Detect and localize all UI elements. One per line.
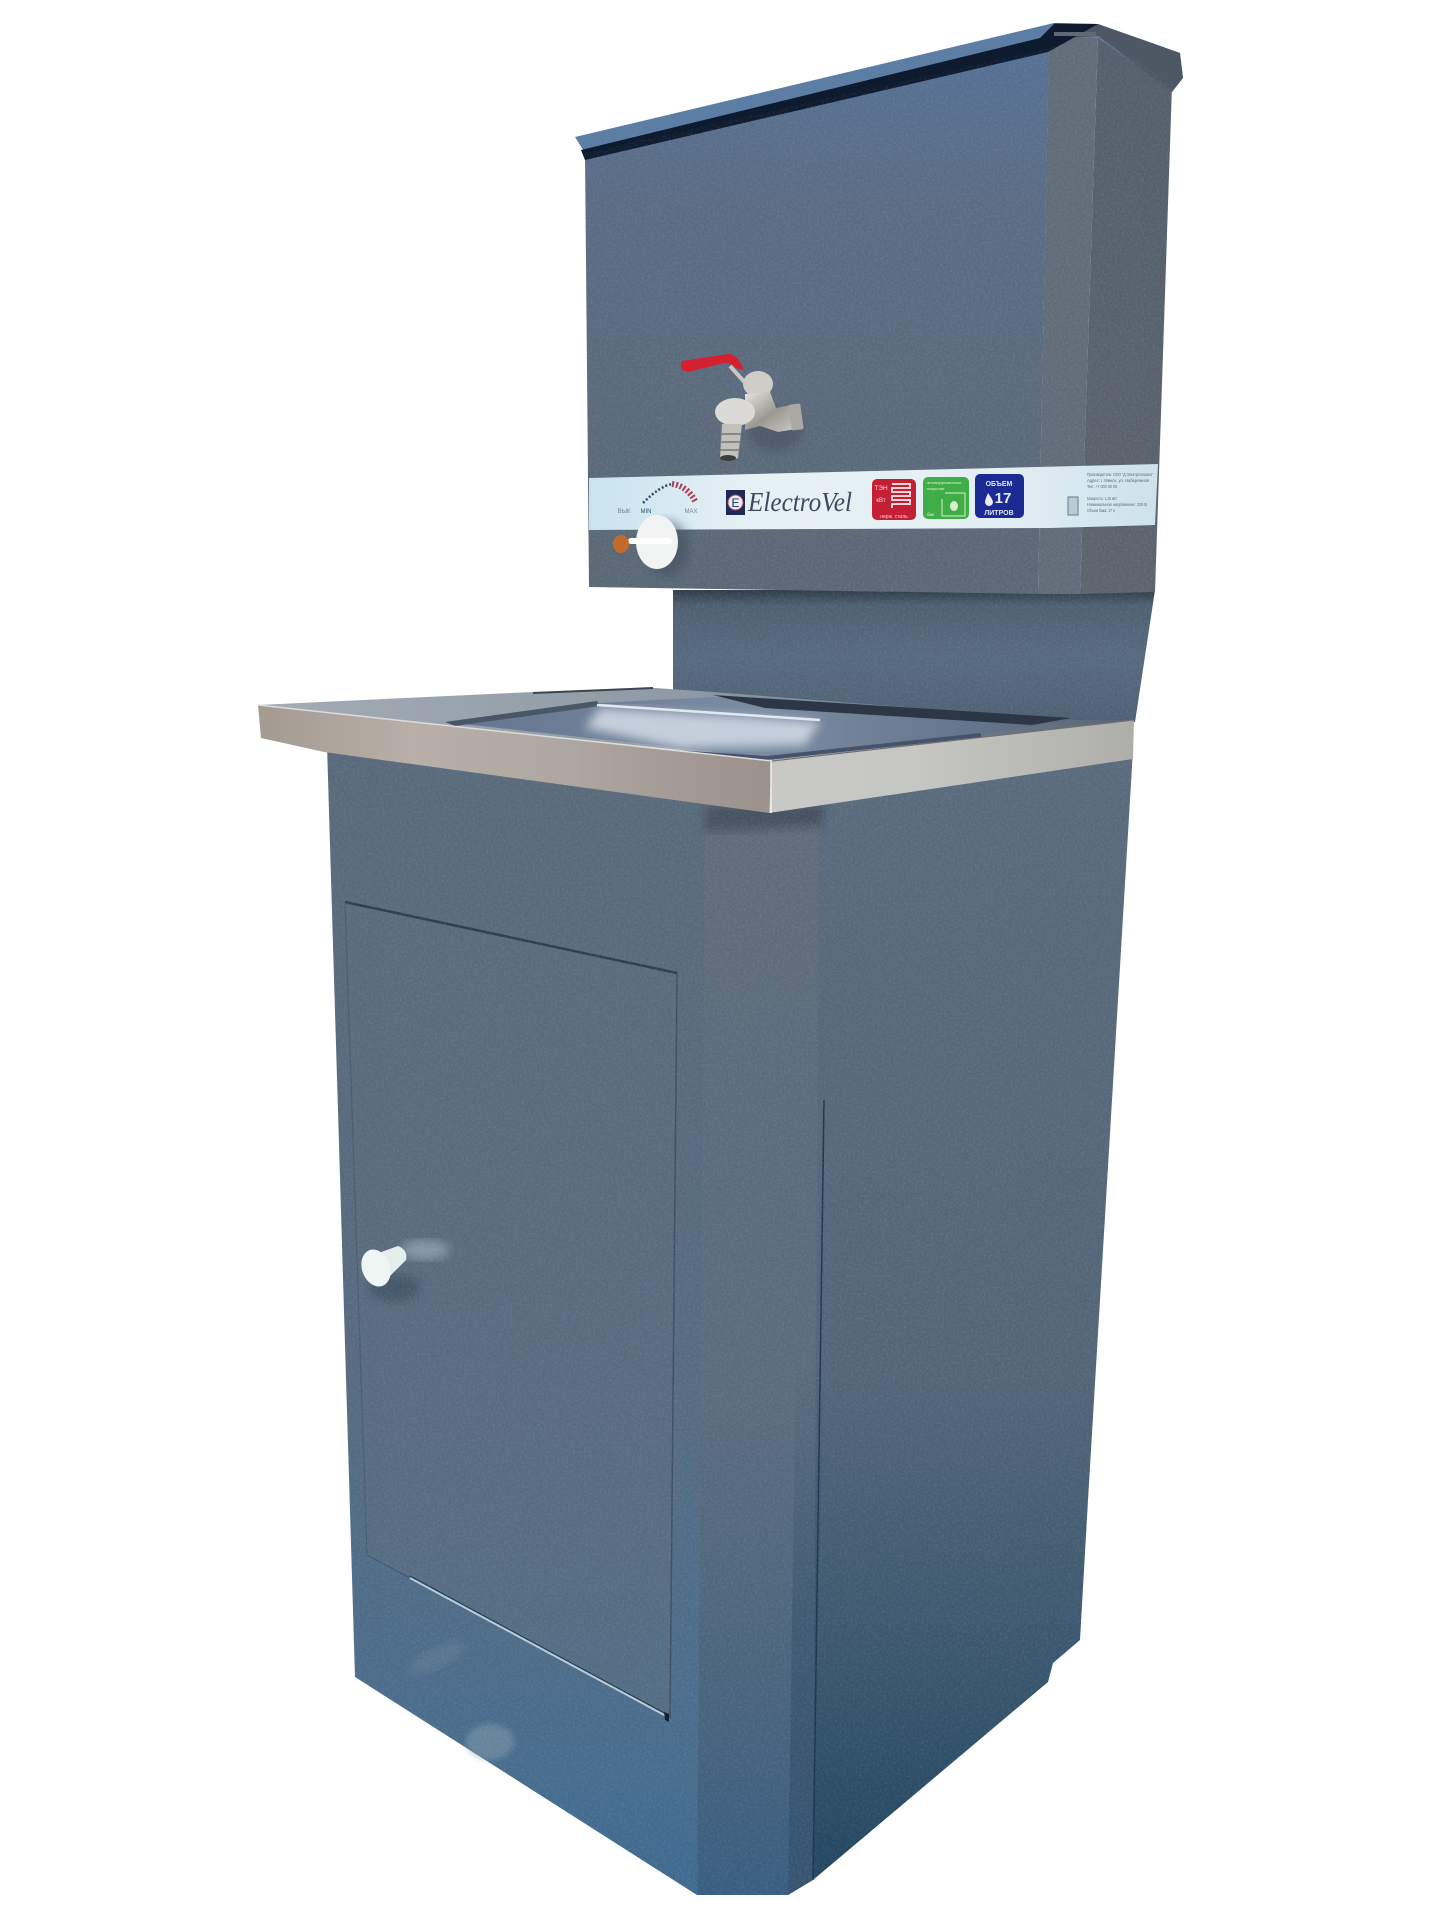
- badge: anticorrosion coating: бак: [927, 512, 934, 517]
- manufacturer info: Мощность: 1,25 кВт: [1087, 496, 1117, 501]
- brand logo: E: [731, 496, 740, 510]
- water heater washstand product photo: [258, 20, 1200, 1900]
- manufacturer info: Тел. +7 000 00 00: [1087, 484, 1117, 489]
- dial scale: [618, 484, 698, 515]
- tank side face: [1080, 35, 1172, 594]
- badge: volume 17 litres: ОБЪЕМ: [986, 481, 1013, 488]
- manufacturer info: Номинальное напряжение: 220 В: [1087, 502, 1147, 507]
- tank lid: [575, 23, 1183, 160]
- basin: [445, 695, 1071, 758]
- dial scale: MIN: [640, 509, 652, 515]
- counter side edge: [769, 720, 1134, 813]
- indicator lamp: [613, 535, 629, 553]
- faucet: [681, 354, 804, 461]
- cabinet: pedestal body: [327, 745, 1133, 1895]
- tank corner strip: [1038, 35, 1098, 594]
- badge: volume 17 litres: ЛИТРОВ: [984, 510, 1014, 517]
- badge: heating element: кВт: [876, 498, 886, 504]
- badge: anticorrosion coating: [923, 477, 969, 519]
- manufacturer info: Производитель: ООО "Д Электротехника": [1087, 472, 1153, 477]
- dial scale: MAX: [684, 509, 698, 515]
- badge: anticorrosion coating: антикоррозионное: [927, 480, 962, 485]
- badge: heating element: нерж. сталь: [880, 514, 908, 520]
- tank front face: [585, 48, 1049, 594]
- badge: volume 17 litres: [975, 474, 1024, 518]
- badge: heating element: [872, 479, 916, 520]
- door knob: [356, 1240, 449, 1302]
- manufacturer info: [1068, 472, 1153, 515]
- brand logo: ElectroVel: [747, 487, 852, 517]
- dial scale: ВЫК: [618, 509, 631, 515]
- manufacturer info: Адрес: г. Минск, ул. Набережная: [1087, 478, 1150, 483]
- label band: [589, 464, 1158, 530]
- sink countertop: [258, 688, 1134, 813]
- water tank: [575, 23, 1183, 594]
- badge: heating element: ТЭН: [874, 485, 888, 492]
- faucet handle: [681, 354, 744, 372]
- pillar behind basin: [673, 590, 1155, 722]
- badge: anticorrosion coating: покрытие: [927, 486, 945, 491]
- cabinet door: [345, 902, 677, 1722]
- badge: volume 17 litres: 17: [995, 490, 1011, 507]
- manufacturer info: Объем бака: 17 л: [1087, 508, 1115, 513]
- counter front edge: [258, 705, 772, 813]
- grain texture: [320, 20, 1200, 1900]
- thermostat knob: [613, 515, 690, 576]
